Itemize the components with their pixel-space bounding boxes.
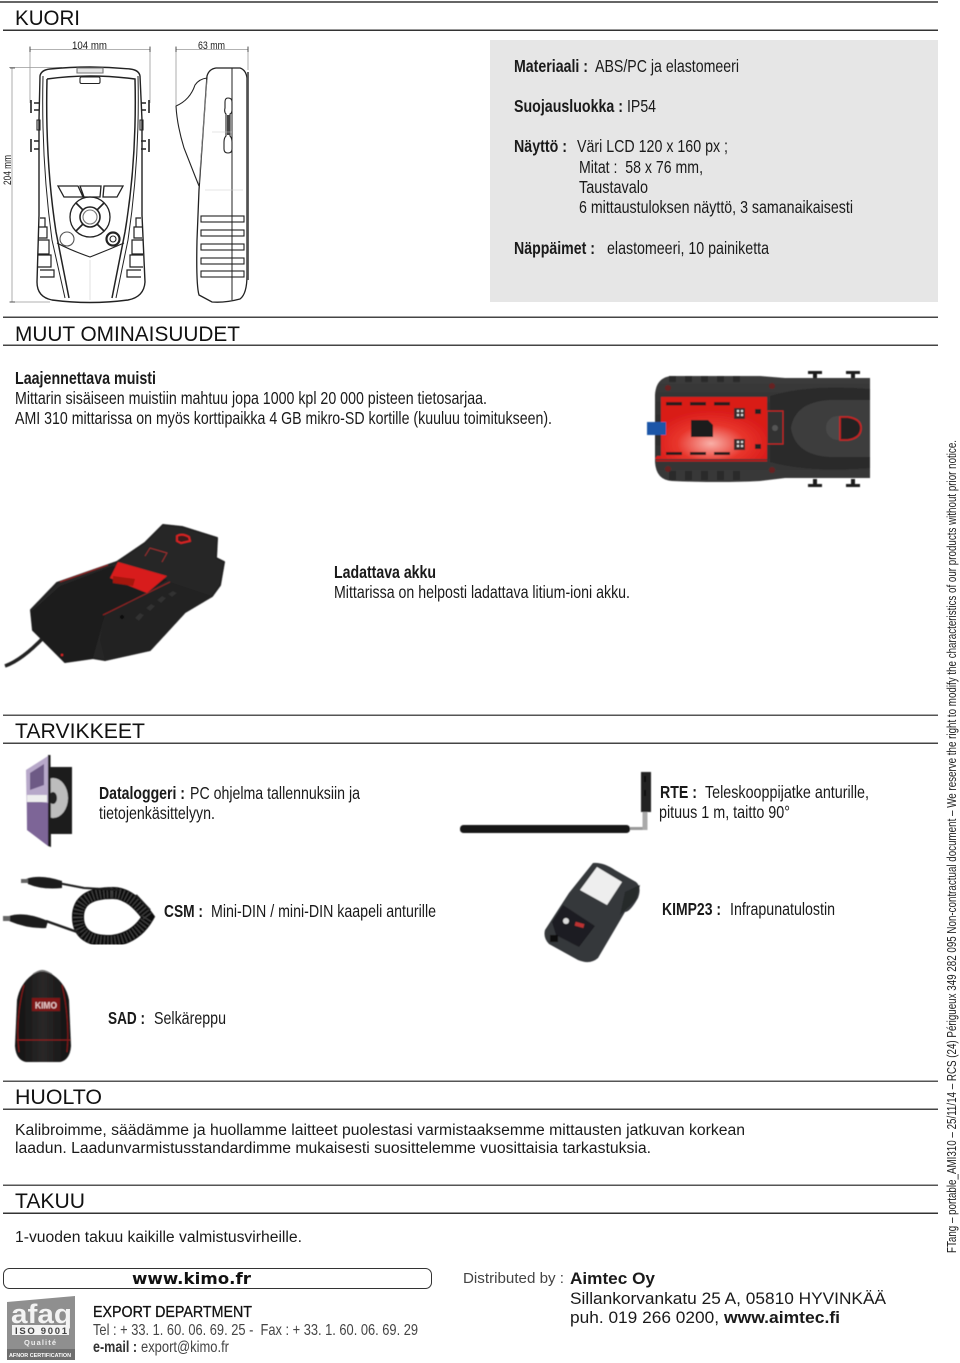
- footer: distributor: www.aimtec.fi: [723, 1308, 840, 1327]
- icon: Dataloggeri software box: [26, 755, 72, 847]
- panel: specifications: ABS/PC ja elastomeeri: [595, 56, 739, 76]
- text block: RTE: [659, 782, 869, 822]
- panel: specifications: elastomeeri, 10 painiketta: [607, 238, 769, 258]
- technical drawing: dimensions: [2, 40, 248, 302]
- text block: expanded memory: Mittarin sisäiseen muistiin mahtuu jopa 1000 kpl 20 000 pisteen tietosarjaa.: [15, 388, 487, 408]
- technical drawing: dimensions: 63 mm: [198, 40, 225, 52]
- panel: specifications: Väri LCD 120 x 160 px ;: [577, 136, 728, 156]
- icon: CSM coiled cable: [3, 877, 150, 941]
- text block: KIMP23: [662, 899, 835, 919]
- icon: KIMP23 printer: [544, 863, 640, 962]
- text block: service: laadun. Laadunvarmistusstandardimme mukaisesti suosittelemme vuosittaisia tarkastuksia.: [15, 1140, 651, 1157]
- panel: specifications: Suojausluokka :: [514, 96, 623, 116]
- icon: SAD backpack: KIMO: [35, 1000, 57, 1012]
- text block: Dataloggeri: Dataloggeri :: [99, 783, 185, 803]
- text block: RTE: RTE :: [660, 782, 697, 802]
- panel: specifications: Materiaali :: [514, 56, 588, 76]
- icon: RTE telescopic extension: [460, 772, 651, 833]
- vertical legal note: FTang – portable_AMI310 – 25/11/14 – RCS (24) Périgueux 349 282 095 Non-contractual document – We reserve the right to modify the characteristics of our products without prior notice.: [944, 440, 959, 1253]
- text block: RTE: Teleskooppijatke anturille,: [705, 782, 869, 802]
- footer: website bar: [4, 1268, 432, 1288]
- logo: AFAQ ISO 9001: AFNOR CERTIFICATION: [9, 1353, 71, 1359]
- technical drawing: dimensions: 204 mm: [2, 155, 14, 185]
- heading: KUORI: KUORI: [15, 6, 80, 30]
- text block: SAD: SAD :: [108, 1008, 145, 1028]
- footer: export department contact: EXPORT DEPARTMENT: [93, 1304, 252, 1321]
- text block: expanded memory: [15, 368, 552, 428]
- panel: specifications: Näppäimet :: [514, 238, 595, 258]
- logo: AFAQ ISO 9001: ISO 9001: [15, 1326, 68, 1337]
- technical drawing: front view: [31, 67, 149, 302]
- panel: specifications: Näyttö :: [514, 136, 567, 156]
- text block: SAD: Selkäreppu: [154, 1008, 226, 1028]
- text block: SAD: [108, 1008, 226, 1028]
- text block: service: [15, 1122, 745, 1157]
- footer: distributor: Sillankorvankatu 25 A, 05810 HYVINKÄÄ: [570, 1289, 887, 1308]
- text block: CSM: CSM :: [164, 901, 203, 921]
- technical drawing: dimensions: 104 mm: [72, 40, 107, 52]
- heading: TARVIKKEET: TARVIKKEET: [15, 719, 145, 743]
- text block: rechargeable battery: Mittarissa on helposti ladattava litium-ioni akku.: [334, 582, 630, 602]
- heading: MUUT OMINAISUUDET: MUUT OMINAISUUDET: [15, 322, 240, 346]
- footer: export department contact: Tel : + 33. 1. 60. 06. 69. 25 - Fax : + 33. 1. 60. 06. 69. 29: [93, 1322, 418, 1339]
- text block: expanded memory: Laajennettava muisti: [15, 368, 156, 388]
- footer: website bar: www.kimo.fr: [132, 1269, 251, 1288]
- logo: AFAQ ISO 9001: [7, 1296, 75, 1360]
- footer: export department contact: [93, 1304, 418, 1356]
- footer: distributor: puh. 019 266 0200,: [570, 1308, 719, 1327]
- technical drawing: side view: [176, 68, 248, 302]
- text block: CSM: Mini-DIN / mini-DIN kaapeli anturille: [211, 901, 436, 921]
- heading: HUOLTO: HUOLTO: [15, 1085, 102, 1109]
- panel: specifications: 6 mittaustuloksen näyttö, 3 samanaikaisesti: [579, 197, 853, 217]
- text block: expanded memory: AMI 310 mittarissa on myös korttipaikka 4 GB mikro-SD kortille (kuuluu toimitukseen).: [15, 408, 552, 428]
- logo: AFAQ ISO 9001: Qualité: [24, 1338, 56, 1347]
- footer: distributor: Distributed by :: [463, 1271, 564, 1287]
- footer: export department contact: export@kimo.fr: [141, 1339, 229, 1356]
- footer: distributor: Aimtec Oy: [570, 1269, 656, 1288]
- text block: service: Kalibroimme, säädämme ja huollamme laitteet puolestasi varmistaaksemme mittausten jatkuvan korkean: [15, 1122, 745, 1139]
- photo: meter back with open battery bay: [647, 371, 870, 487]
- footer: export department contact: e-mail :: [93, 1339, 137, 1356]
- text block: Dataloggeri: PC ohjelma tallennuksiin ja: [190, 783, 360, 803]
- panel: specifications: Taustavalo: [579, 177, 648, 197]
- icon: SAD backpack: [15, 970, 71, 1062]
- text block: KIMP23: KIMP23 :: [662, 899, 721, 919]
- panel: specifications: Mitat : 58 x 76 mm,: [579, 157, 703, 177]
- panel: specifications: [490, 40, 938, 302]
- text block: warranty: 1-vuoden takuu kaikille valmistusvirheille.: [15, 1229, 302, 1246]
- text block: CSM: [164, 901, 436, 921]
- text block: KIMP23: Infrapunatulostin: [730, 899, 835, 919]
- text block: Dataloggeri: tietojenkäsittelyyn.: [99, 803, 215, 823]
- text block: rechargeable battery: [334, 562, 630, 602]
- text block: RTE: pituus 1 m, taitto 90°: [659, 802, 790, 822]
- footer: distributor: [463, 1269, 887, 1327]
- logo: AFAQ ISO 9001: afaq: [11, 1299, 72, 1329]
- text block: Dataloggeri: [99, 783, 360, 823]
- panel: specifications: IP54: [627, 96, 656, 116]
- text block: rechargeable battery: Ladattava akku: [334, 562, 436, 582]
- heading: TAKUU: TAKUU: [15, 1189, 85, 1213]
- photo: meter with battery, angled view: [5, 525, 224, 666]
